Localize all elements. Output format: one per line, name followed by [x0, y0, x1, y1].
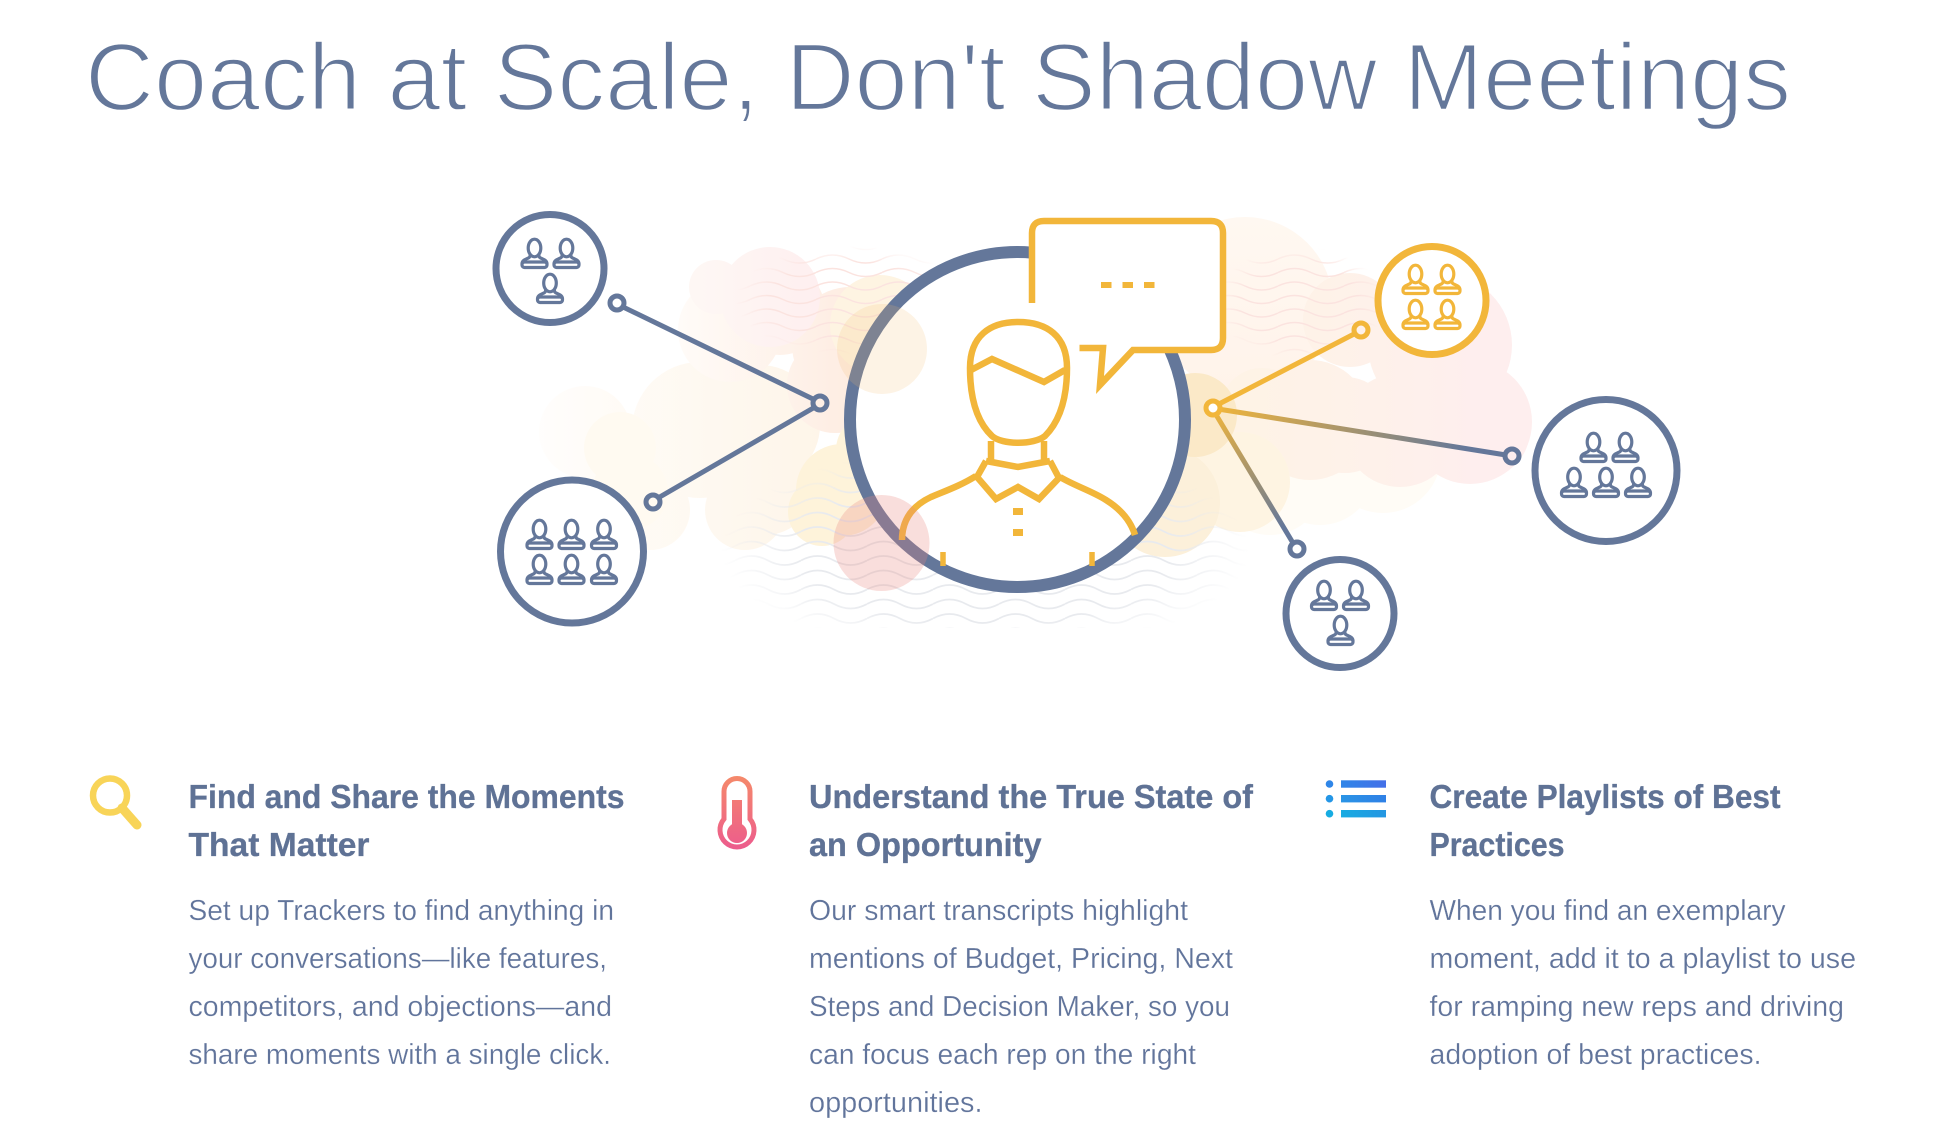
heading: create playlists [1430, 778, 1781, 863]
text: understand body [809, 895, 1233, 1119]
heading: find and share [188, 778, 624, 863]
text: create playlists body: When you find an exemplary [1430, 895, 1786, 927]
text: find and share body: Set up Trackers to find anything in [188, 895, 614, 927]
heading: understand the true state: an Opportunity [809, 826, 1042, 863]
text: create playlists body: for ramping new reps and driving [1430, 991, 1844, 1023]
team circle: right, five people [1535, 400, 1677, 542]
team circle: bottom right, three people [1286, 560, 1394, 668]
text: create playlists body [1430, 895, 1856, 1071]
main circle ring [850, 252, 1185, 587]
heading: find and share: That Matter [188, 826, 370, 863]
text: understand body: Our smart transcripts highlight [809, 895, 1188, 927]
heading: understand the true state: Understand the True State of [809, 778, 1254, 815]
text: understand body: Steps and Decision Maker, so you [809, 991, 1230, 1023]
text: understand body: can focus each rep on the right [809, 1039, 1196, 1071]
team circle: bottom left, six people [500, 480, 644, 623]
wavy lines [700, 240, 1390, 628]
background clouds, right [1110, 217, 1532, 557]
panel: create playlists [1326, 778, 1856, 1071]
icon: magnifying glass [93, 778, 137, 825]
central illustration: coach network [496, 214, 1677, 668]
tinted circle overlays [834, 304, 930, 591]
heading: create playlists: Practices [1430, 826, 1564, 863]
title: Coach at Scale, Don't Shadow Meetings [85, 24, 1791, 131]
text: create playlists body: adoption of best practices. [1430, 1039, 1762, 1071]
connectors, left [610, 296, 827, 509]
text: find and share body: competitors, and objections—and [188, 991, 612, 1023]
text: find and share body: share moments with a single click. [188, 1039, 611, 1071]
heading: understand the true state [809, 778, 1254, 863]
icon: list [1326, 780, 1386, 818]
text: find and share body [188, 895, 614, 1071]
panel: understand the true state [720, 778, 1254, 1119]
panel: find and share [93, 778, 624, 1071]
team circle: top left, three people [496, 214, 604, 322]
heading: create playlists: Create Playlists of Best [1430, 778, 1781, 815]
heading: find and share: Find and Share the Moments [188, 778, 624, 815]
connectors, right [1206, 323, 1519, 556]
team circle: top right, four people, yellow [1378, 246, 1486, 354]
text: find and share body: your conversations—like features, [188, 943, 607, 975]
person figure [902, 322, 1135, 566]
speech bubble [1032, 221, 1223, 385]
text: create playlists body: moment, add it to a playlist to use [1430, 943, 1856, 975]
text: understand body: opportunities. [809, 1087, 982, 1119]
icon: thermometer [720, 778, 754, 847]
text: understand body: mentions of Budget, Pricing, Next [809, 943, 1233, 975]
background clouds, left [539, 247, 930, 550]
